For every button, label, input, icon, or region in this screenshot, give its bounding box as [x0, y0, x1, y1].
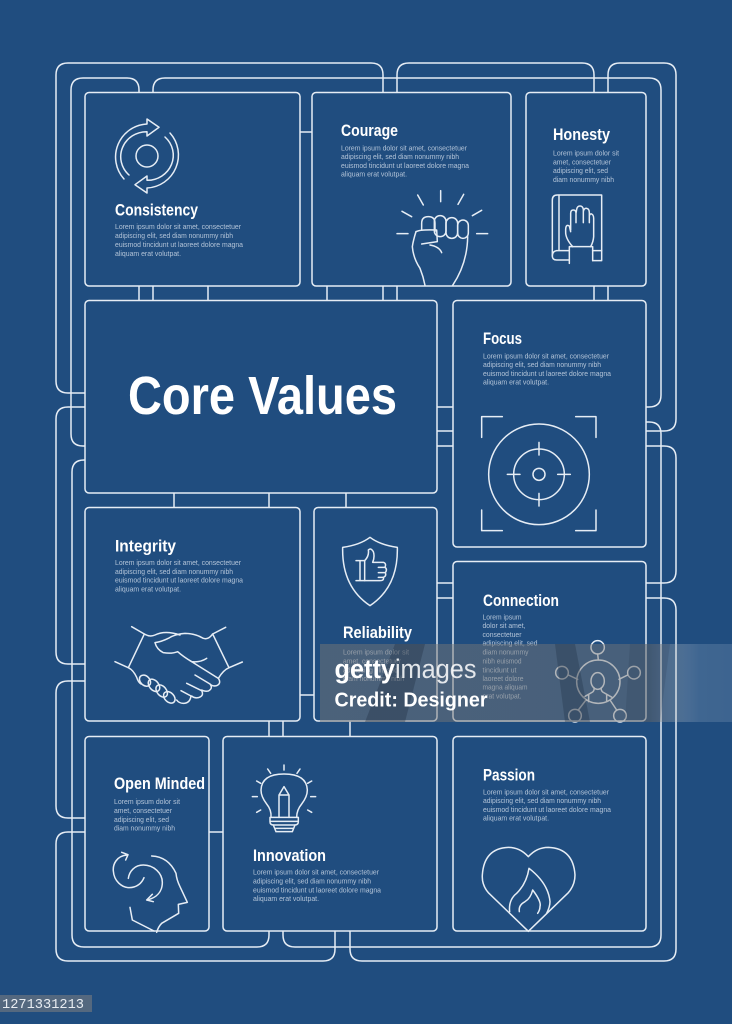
body text: Integrity: euismod tincidunt ut laoreet dolore magna — [115, 575, 244, 584]
body text: Connection: magna aliquam — [482, 683, 528, 692]
body text: Passion: euismod tincidunt ut laoreet dolore magna — [483, 805, 612, 814]
heading: Reliability: Reliability — [343, 624, 413, 642]
body text: Courage: euismod tincidunt ut laoreet dolore magna — [341, 161, 470, 170]
body text: Reliability: amet, consectetuer — [343, 656, 401, 665]
body text: Honesty: amet, consectetuer — [553, 157, 611, 166]
connector line network — [56, 63, 676, 961]
body text: Connection: dolor sit amet, — [482, 621, 526, 630]
icon: hand on book — [552, 195, 602, 263]
body text: Open Minded — [114, 797, 180, 832]
body text: Focus: aliquam erat volutpat. — [483, 378, 549, 386]
icon: network of people — [556, 641, 640, 722]
body text: Open Minded: amet, consectetuer — [114, 806, 172, 815]
panel: Focus — [453, 300, 646, 547]
heading: Honesty: Honesty — [553, 126, 611, 144]
body text: Passion: adipiscing elit, sed diam nonummy nibh — [483, 796, 601, 805]
body text: Integrity — [115, 558, 244, 593]
body text: Connection: diam nonummy — [482, 648, 529, 657]
body text: Focus: adipiscing elit, sed diam nonummy nibh — [483, 360, 601, 369]
body text: Honesty — [553, 149, 619, 184]
icon: head with arrows — [113, 852, 187, 932]
panel: Passion — [453, 736, 646, 931]
body text: Courage — [341, 143, 470, 178]
body text: Reliability: adipiscing elit, sed — [343, 665, 398, 674]
panel: Courage — [312, 92, 511, 286]
icon: raised fist — [397, 191, 488, 285]
body text: Integrity: adipiscing elit, sed diam nonummy nibh — [115, 567, 233, 576]
watermark logo: gettyimages — [334, 654, 476, 684]
body text: Reliability — [343, 648, 409, 683]
body text: Innovation: aliquam erat volutpat. — [253, 894, 319, 903]
icon: light bulb with pencil — [252, 765, 316, 832]
body text: Reliability: diam nonummy nibh — [343, 674, 404, 683]
body text: Connection: laoreet dolore — [482, 674, 524, 683]
body text: Integrity: Lorem ipsum dolor sit amet, consectetuer — [115, 558, 241, 567]
heading: Consistency: Consistency — [115, 202, 199, 220]
body text: Innovation: euismod tincidunt ut laoreet dolore magna — [253, 885, 382, 894]
body text: Consistency: adipiscing elit, sed diam nonummy nibh — [115, 231, 233, 240]
body text: Connection: adipiscing elit, sed — [482, 639, 538, 648]
panel: Innovation — [223, 736, 437, 931]
body text: Open Minded: adipiscing elit, sed — [114, 815, 169, 824]
body text: Focus: Lorem ipsum dolor sit amet, consectetuer — [483, 351, 609, 360]
body text: Connection: erat volutpat. — [482, 691, 522, 700]
panel: Integrity — [85, 508, 300, 721]
panel: Consistency — [85, 92, 300, 286]
panel: Reliability — [314, 508, 437, 721]
watermark credit: Credit: Designer — [334, 690, 488, 712]
body text: Honesty: diam nonummy nibh — [553, 175, 614, 184]
body text: Connection: nibh euismod — [482, 656, 522, 665]
heading: Innovation: Innovation — [253, 847, 326, 865]
body text: Focus: euismod tincidunt ut laoreet dolore magna — [483, 369, 612, 378]
title: Core Values — [128, 366, 397, 426]
body text: Consistency: aliquam erat volutpat. — [115, 249, 181, 258]
body text: Connection: Lorem ipsum — [482, 612, 522, 621]
body text: Passion: aliquam erat volutpat. — [483, 814, 549, 823]
body text: Honesty: Lorem ipsum dolor sit — [553, 149, 619, 158]
heading: Connection: Connection — [483, 592, 559, 610]
heading: Open Minded: Open Minded — [114, 775, 205, 793]
panel: Honesty — [526, 92, 646, 286]
watermark band — [320, 644, 732, 722]
heading: Courage: Courage — [341, 122, 398, 140]
body text: Consistency: euismod tincidunt ut laoreet dolore magna — [115, 240, 244, 249]
body text: Passion: Lorem ipsum dolor sit amet, consectetuer — [483, 787, 609, 796]
panel: Core Values title — [85, 300, 437, 493]
body text: Passion — [483, 787, 612, 823]
icon: target — [482, 417, 596, 531]
body text: Courage: Lorem ipsum dolor sit amet, consectetuer — [341, 143, 467, 152]
icon: circular arrows — [116, 119, 178, 193]
body text: Open Minded: Lorem ipsum dolor sit — [114, 797, 180, 806]
body text: Integrity: aliquam erat volutpat. — [115, 584, 181, 593]
body text: Innovation — [253, 868, 382, 903]
body text: Innovation: Lorem ipsum dolor sit amet, consectetuer — [253, 868, 379, 877]
icon: heart with flame — [482, 847, 575, 931]
body text: Connection: tincidunt ut — [482, 665, 516, 674]
body text: Courage: aliquam erat volutpat. — [341, 170, 407, 178]
body text: Connection: consectetuer — [482, 630, 522, 639]
body text: Focus — [483, 351, 612, 386]
body text: Connection — [482, 612, 538, 700]
body text: Reliability: Lorem ipsum dolor sit — [343, 648, 409, 657]
body text: Consistency: Lorem ipsum dolor sit amet, consectetuer — [115, 222, 241, 231]
heading: Integrity: Integrity — [115, 538, 177, 556]
body text: Honesty: adipiscing elit, sed — [553, 166, 608, 175]
heading: Passion: Passion — [483, 767, 535, 785]
image id tag: 1271331213 — [2, 998, 84, 1013]
body text: Open Minded: diam nonummy nibh — [114, 823, 175, 832]
body text: Courage: adipiscing elit, sed diam nonummy nibh — [341, 152, 459, 161]
heading: Focus: Focus — [483, 330, 522, 348]
body text: Innovation: adipiscing elit, sed diam nonummy nibh — [253, 876, 371, 885]
panel: Connection — [453, 562, 646, 722]
icon: handshake — [115, 627, 242, 705]
body text: Consistency — [115, 222, 244, 258]
panel: Open Minded — [85, 736, 209, 932]
icon: shield with thumbs up — [343, 537, 397, 606]
